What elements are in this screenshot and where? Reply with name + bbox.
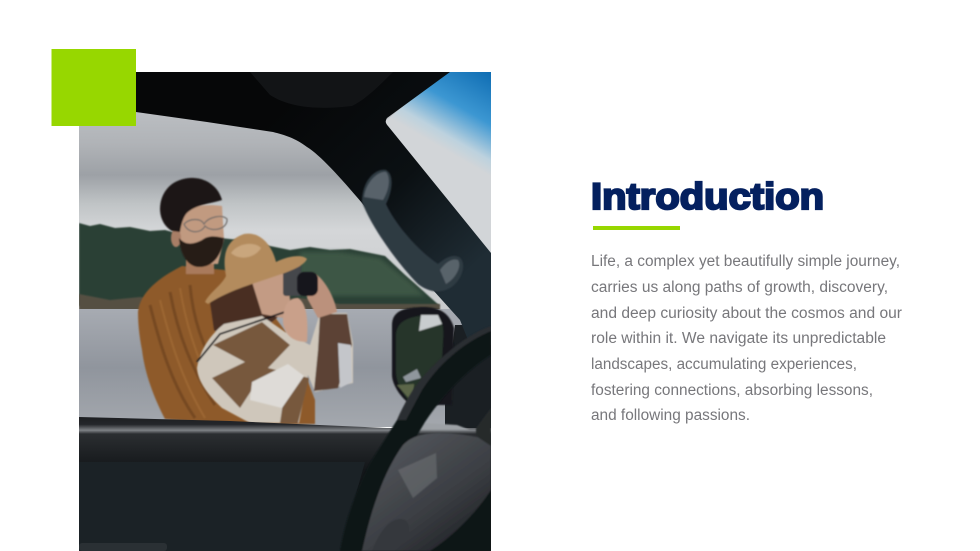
sky: [79, 104, 450, 309]
door pocket highlight: [79, 543, 167, 551]
lake: [79, 309, 491, 427]
neck: [185, 260, 215, 275]
body paragraph: [591, 253, 902, 424]
camera strap: [197, 312, 285, 362]
face: [252, 272, 290, 318]
forest treeline: [79, 223, 440, 306]
dashboard pillar base: [445, 325, 491, 430]
woman: [197, 234, 353, 423]
blue rear window sky: [386, 72, 491, 218]
body paragraph: carries us along paths of growth, discovery,: [591, 279, 888, 296]
ear: [171, 229, 181, 247]
body paragraph: role within it. We navigate its unpredictable: [591, 330, 886, 347]
body paragraph: fostering connections, absorbing lessons,: [591, 382, 873, 399]
body paragraph: landscapes, accumulating experiences,: [591, 356, 857, 373]
hat: [205, 234, 307, 304]
hair: [160, 178, 222, 232]
man: [138, 178, 315, 424]
camera: [283, 263, 301, 296]
glasses: [184, 217, 227, 232]
shoreline: [79, 294, 440, 310]
door lower upholstery: [79, 462, 365, 551]
car roof and pillar: [136, 72, 491, 338]
beard: [179, 236, 224, 267]
grab handle: [362, 170, 463, 291]
window ledge beyond wheel: [420, 423, 469, 430]
body paragraph: Life, a complex yet beautifully simple journey,: [591, 253, 900, 270]
hair: [210, 284, 278, 332]
title: Introduction: [591, 175, 824, 217]
sweater: [138, 266, 315, 424]
face: [178, 205, 224, 264]
door panel: [79, 417, 491, 551]
steering wheel: [340, 326, 491, 551]
green accent square: [52, 49, 136, 126]
body paragraph: and deep curiosity about the cosmos and our: [591, 305, 902, 322]
photo: couple photographing a lake through a car window: [79, 72, 491, 551]
side mirror: [392, 307, 454, 405]
title underline accent: [593, 226, 680, 230]
roof console: [250, 72, 393, 108]
body paragraph: and following passions.: [591, 407, 750, 424]
hands: [283, 298, 307, 342]
plaid jacket: [197, 313, 353, 423]
lighter trees on far shore: [300, 252, 425, 296]
wheel logo plate: [398, 453, 437, 498]
wheel hub: [362, 433, 491, 551]
